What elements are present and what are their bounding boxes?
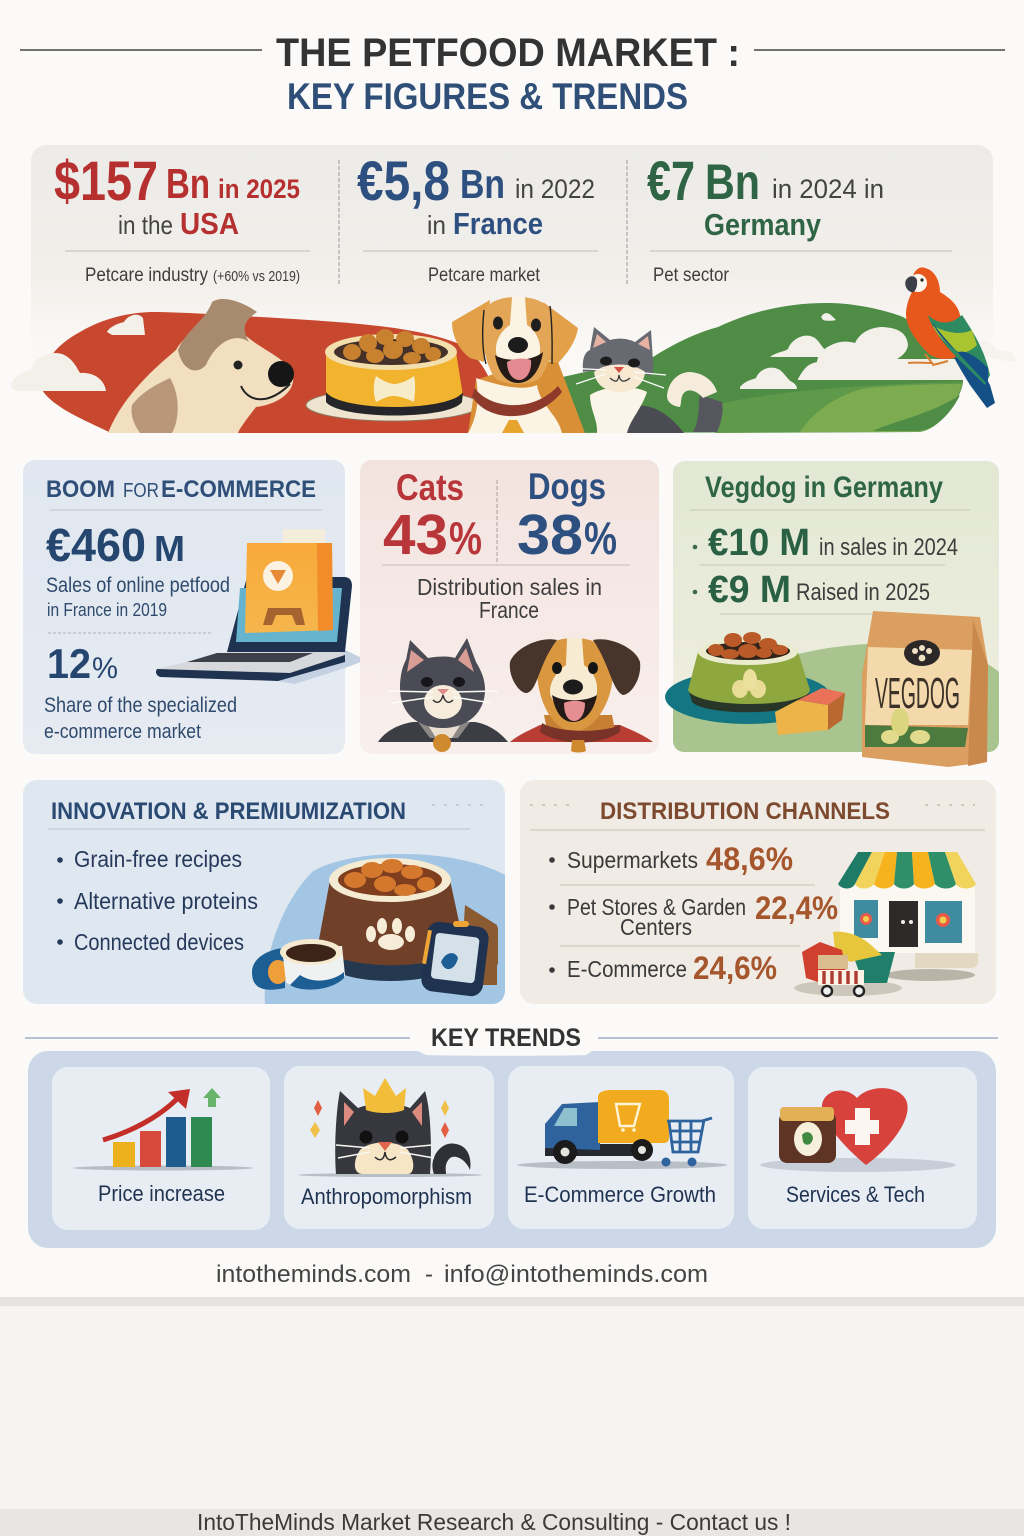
list: innovations: Grain-free recipes [74,846,242,872]
stat: dogs [517,466,617,567]
list: innovations: Alternative proteins [74,888,258,914]
panel: cats and dogs: France [479,597,539,623]
icon: shop [838,852,978,981]
stat: 460 M: in France in 2019 [47,600,167,620]
card: services and tech [748,1067,977,1229]
panel: key trends [28,1051,996,1248]
stat: 12% [44,640,237,743]
illustration: parrot [905,267,995,408]
icon: Vegdog bag [862,611,988,767]
stat: France: in 2022 [515,174,595,204]
item: e-commerce: 24,6% [693,950,777,986]
heading: E-COMMERCE [161,476,316,503]
stat: cats: Cats [396,467,464,508]
contact line [216,1261,708,1288]
stat: France: €5,8 [357,149,450,212]
footer bar [0,1509,1024,1536]
panel: Vegdog [665,461,999,767]
illustration: left dog [108,299,294,433]
stat: Germany: Pet sector [653,265,730,286]
stat: 12%: % [92,652,118,685]
stat: dogs: % [584,512,617,564]
panel: innovation [23,780,505,1004]
heading: INNOVATION & PREMIUMIZATION [51,798,406,825]
illustration: green hill [558,303,963,433]
stat: France: Petcare market [428,265,541,286]
card: e-commerce growth [508,1066,734,1229]
icon: connected device [420,920,498,998]
stat: sales: in sales in 2024 [819,534,958,561]
item: supermarkets: 48,6% [706,841,793,877]
stat: cats: % [449,512,482,564]
card: e-commerce growth: E-Commerce Growth [524,1182,716,1207]
stat: 12%: e-commerce market [44,721,201,743]
stat: Germany: Germany [704,207,822,242]
panel: cats and dogs [360,460,659,754]
stat: USA: in the [118,210,173,240]
item: pet stores: Pet Stores & Garden [567,894,746,920]
card: price increase [52,1067,270,1230]
item: e-commerce: E-Commerce [567,956,687,982]
stat: France: in [427,210,446,240]
heading: BOOM [46,476,115,503]
stat: USA: Petcare industry [85,265,208,286]
caption: Distribution sales in [417,574,602,600]
stat: 460 M: Sales of online petfood [46,574,230,597]
stat: France [357,149,598,286]
stat: sales: €10 M [708,522,810,564]
card: anthropomorphism [284,1066,494,1229]
icon: shopping cart [794,932,902,996]
title [20,31,1005,117]
icon: small cup [252,939,345,990]
item: pet stores [549,890,838,940]
stat: France: France [453,206,543,241]
stat: raised: €9 M [708,569,791,611]
icon: laptop and shopping bag [156,529,366,684]
icon: dog [510,638,653,752]
icon: cat [378,638,508,752]
illustration: green hill [673,643,999,752]
footer bar: IntoTheMinds Market Research & Consulting - Contact us ! [197,1509,791,1535]
icon: green bowl [665,632,831,724]
panel: distribution channels [520,780,996,1004]
contact line: intotheminds.com [216,1261,411,1288]
title: KEY FIGURES & TRENDS [287,76,688,117]
icon: tofu block [775,688,845,735]
item: pet stores: 22,4% [755,890,838,926]
heading: DISTRIBUTION CHANNELS [600,798,890,825]
item: e-commerce [549,950,777,986]
card: price increase: Price increase [98,1181,225,1206]
list: innovations: Connected devices [74,929,244,955]
illustration: cat [568,327,723,433]
illustration: middle dog [452,297,585,433]
illustration: food bowl [306,329,480,421]
item: supermarkets [549,841,793,877]
stat: cats [383,467,482,567]
stat: dogs: 38 [517,503,583,567]
stat: 12%: Share of the specialized [44,694,237,717]
stat: raised: Raised in 2025 [796,579,930,606]
item: supermarkets: Supermarkets [567,847,698,873]
stat: France: Bn [460,161,505,207]
stat: USA: $157 [54,149,158,212]
contact line: - [425,1261,433,1288]
contact line: info@intotheminds.com [444,1261,708,1288]
stat: 460 M: €460 [46,519,146,571]
icon: premium bowl [318,858,497,985]
stat: USA: Bn [166,160,210,207]
stat: Germany: €7 [647,149,695,212]
illustration: clouds [11,313,1016,391]
stat: 460 M [46,519,230,620]
stat: dogs: Dogs [528,466,606,507]
stat: 460 M: M [154,528,185,569]
heading: Vegdog in Germany [705,471,943,504]
panel: market size [11,145,1016,433]
title: THE PETFOOD MARKET : [276,31,740,75]
stat: Germany [647,149,952,286]
stat: Germany: in 2024 in [772,174,884,204]
heading: key trends: KEY TRENDS [431,1024,581,1052]
stat: USA [54,149,310,286]
stat: USA: USA [180,206,239,241]
stat: USA: in 2025 [218,174,300,204]
heading [46,476,316,503]
heading: FOR [123,480,159,502]
stat: sales [693,522,958,564]
list: innovations [57,846,258,955]
stat: 12%: 12 [47,640,91,687]
card: anthropomorphism: Anthropomorphism [301,1184,472,1209]
stat: cats: 43 [383,503,448,567]
item: pet stores: Centers [620,914,692,940]
card: services and tech: Services & Tech [786,1182,925,1207]
panel: e-commerce [23,460,366,754]
illustration: blue blob [265,854,505,1004]
stat: USA: (+60% vs 2019) [213,268,300,285]
stat: Germany: Bn [705,154,760,210]
illustration: red hill [39,312,500,433]
stat: raised [693,569,930,611]
